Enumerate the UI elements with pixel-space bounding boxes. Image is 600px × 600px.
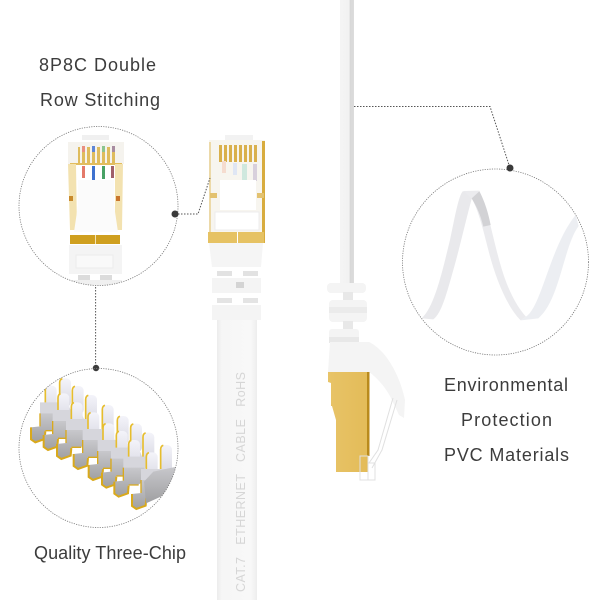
gold shield [328,372,370,472]
leader line to flat cable circle [354,106,514,172]
leader dot [93,365,99,371]
heading: Environmental Protection PVC Materials: PVC Materials [444,445,569,465]
flat ribbon [422,191,579,320]
heading: Environmental Protection PVC Materials: Protection [461,410,552,430]
side round cable [340,0,354,285]
strain relief ribs [327,283,367,343]
leader line to plug [172,178,210,218]
panel: circle flat cable [402,169,588,355]
front RJ45 plug [208,135,265,320]
heading: Quality Three-Chip: Quality Three-Chip [34,543,186,563]
side RJ45 plug [327,283,405,480]
circle outline [402,169,588,355]
flat cable with printed text [217,318,257,600]
leader dot [172,210,178,218]
leader dot [506,164,514,172]
circle outline [19,126,178,286]
panel: circle gold contact pins [19,368,178,528]
boot [209,243,263,267]
latch clip [360,398,397,480]
heading: Environmental Protection PVC Materials [444,375,569,465]
heading: 8P8C Double Row Stitching [39,55,160,110]
gold band [208,232,264,243]
heading: 8P8C Double Row Stitching: 8P8C Double [39,55,156,75]
panel: circle contact plug detail [19,126,178,288]
heading: Environmental Protection PVC Materials: Environmental [444,375,568,395]
coloured wires [78,146,115,180]
cable marking: CAT.7 ETHERNET CABLE RoHS [234,372,248,592]
circle outline [19,368,178,528]
boot [328,342,405,418]
leader line between circles [93,287,99,371]
heading: 8P8C Double Row Stitching: Row Stitching [40,90,160,110]
